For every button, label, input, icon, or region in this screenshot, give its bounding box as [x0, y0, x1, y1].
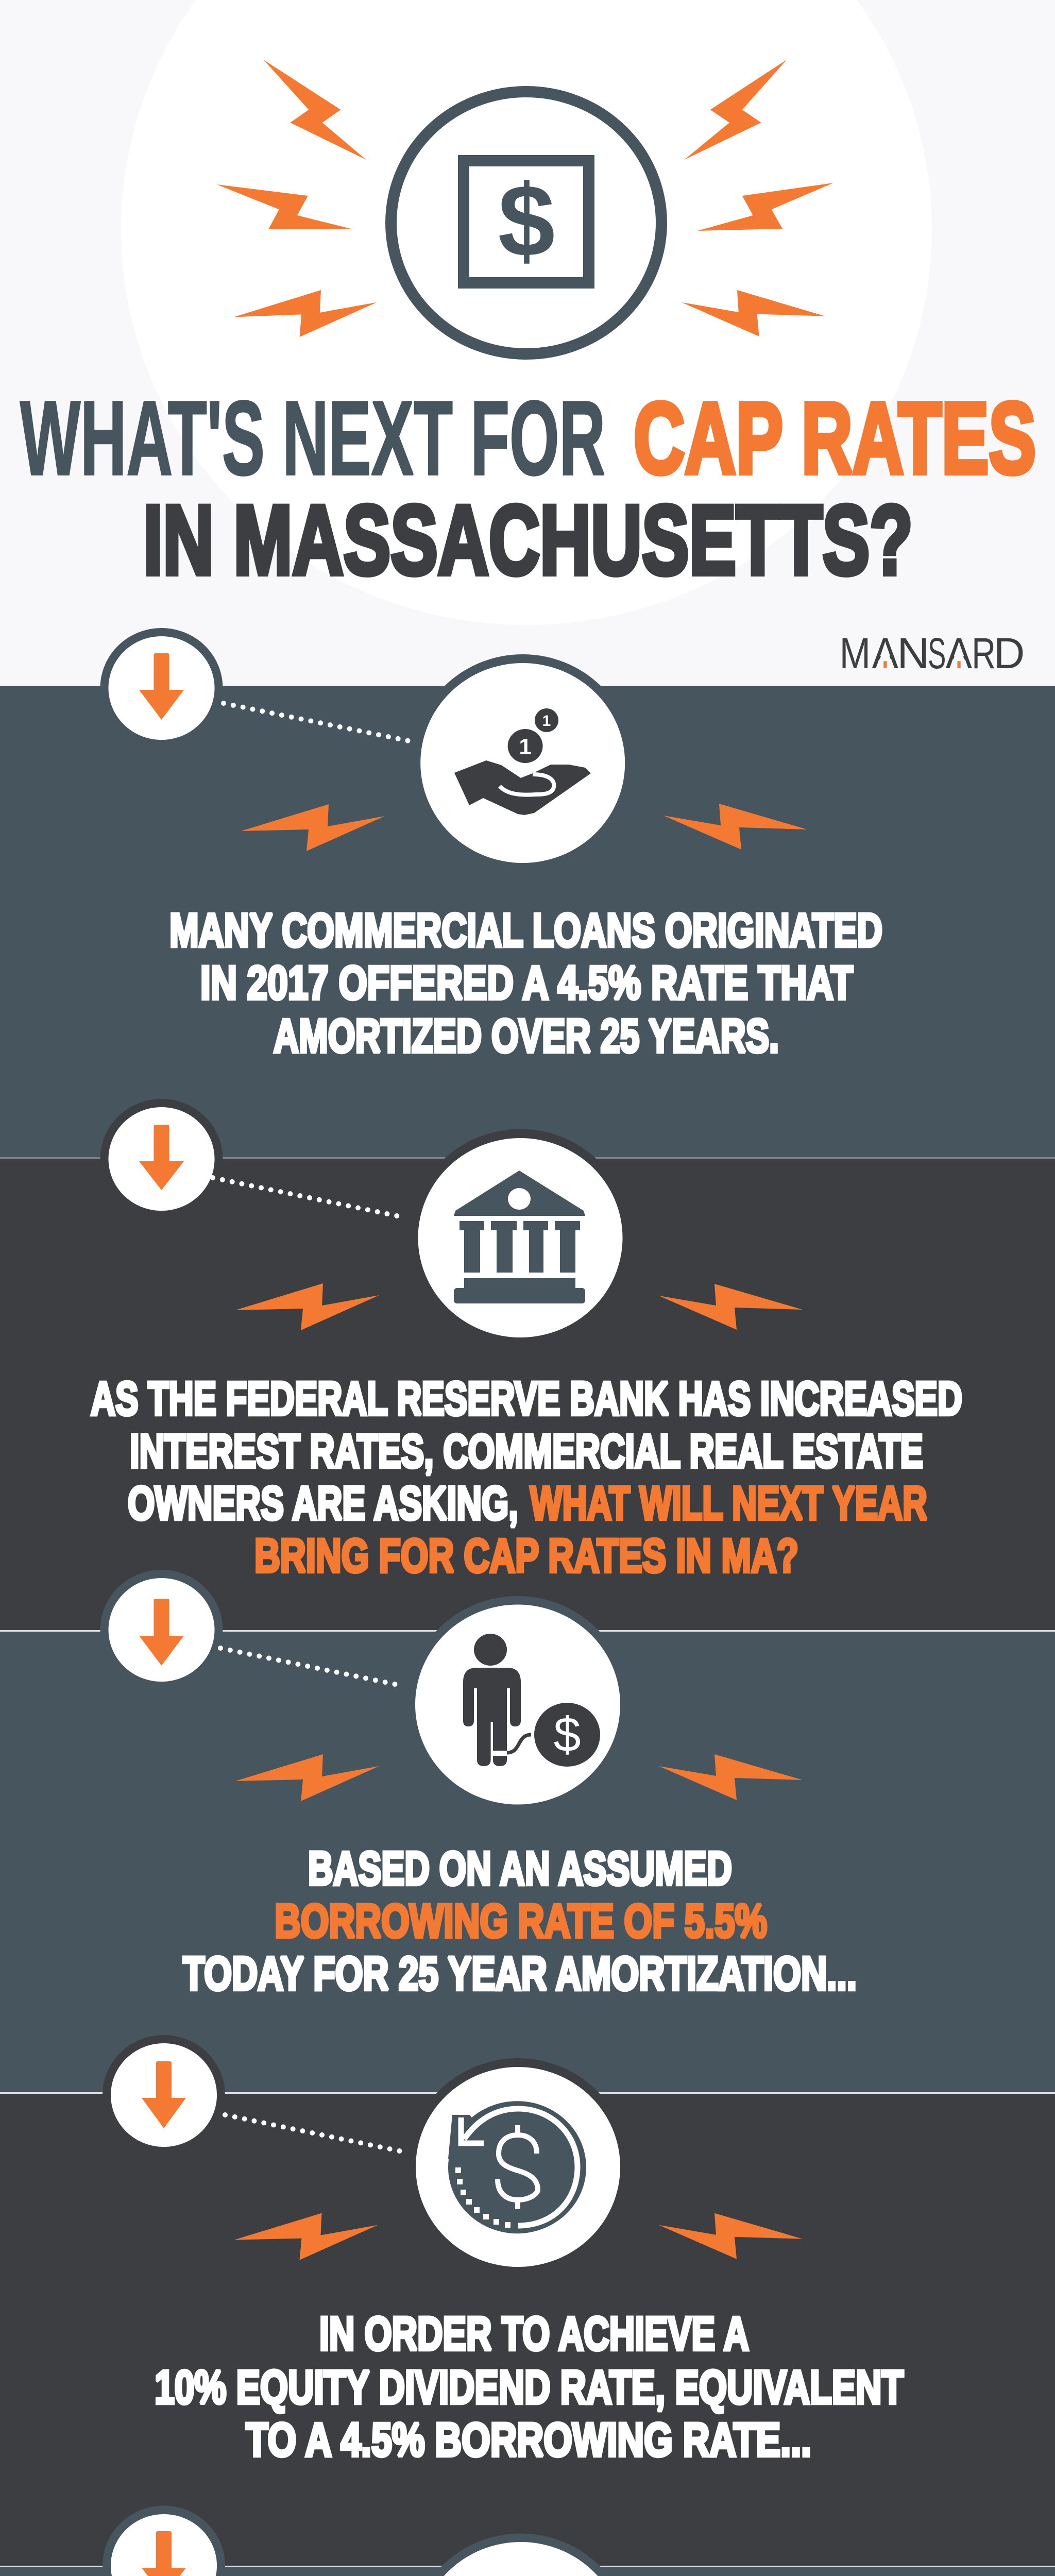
panel: equity dividend: [0, 2035, 1055, 2566]
icon: dollar bill in ring: [391, 92, 661, 354]
icon: dollar bill in ring: $: [498, 164, 555, 278]
dotted connector: [225, 2115, 407, 2153]
icon circle: bank: [410, 1129, 631, 1347]
small Mansard logo: A: [946, 630, 972, 678]
text block: OWNERS ARE ASKING,: [128, 1477, 518, 1530]
arrow badge: [103, 2035, 225, 2155]
white backdrop blob: [121, 0, 932, 625]
text block: AMORTIZED OVER 25 YEARS.: [274, 1010, 779, 1062]
text block: [91, 1372, 962, 1582]
small Mansard logo: M: [840, 630, 871, 678]
lightning bolts: [235, 1754, 803, 1801]
icon circle: rising bar chart: [410, 2534, 632, 2576]
text block: BORROWING RATE OF 5.5%: [275, 1895, 767, 1947]
text block: TO A 4.5% BORROWING RATE...: [246, 2414, 811, 2466]
text block: [169, 904, 882, 1062]
dotted connector: [213, 1178, 404, 1217]
dotted connector: [224, 703, 414, 742]
lightning bolts: [241, 804, 807, 851]
text block: [155, 2308, 904, 2466]
dotted connector: [220, 1648, 402, 1686]
text block: IN ORDER TO ACHIEVE A: [319, 2308, 749, 2360]
title: WHAT'S NEXT FOR: [20, 379, 605, 497]
icon circle: person chained to dollar: $: [554, 1707, 581, 1762]
panel: commercial loans: [0, 628, 1055, 1158]
icon circle: person chained to dollar: [407, 1596, 628, 1813]
arrow badge: [103, 2506, 225, 2576]
lightning bolts: [235, 1283, 803, 1330]
icon: lightning bolts around ring: [217, 60, 833, 337]
small Mansard logo: [840, 630, 1025, 678]
small Mansard logo: N: [897, 630, 929, 678]
arrow badge: [100, 1099, 223, 1219]
panel: borrowing rate: [0, 1570, 1055, 2093]
arrow badge: [100, 628, 223, 748]
text block: BRING FOR CAP RATES IN MA?: [254, 1530, 798, 1582]
small Mansard logo: S: [928, 630, 946, 678]
title: [20, 379, 1036, 595]
text block: [183, 1842, 857, 2000]
icon circle: dollar coin with return arrow: [407, 2058, 628, 2276]
header panel: [0, 0, 1055, 690]
text block: IN 2017 OFFERED A 4.5% RATE THAT: [200, 957, 853, 1009]
text block: TODAY FOR 25 YEAR AMORTIZATION...: [183, 1947, 857, 2000]
icon circle: hand with coins: 1: [542, 713, 551, 730]
icon circle: hand with coins: [412, 654, 634, 872]
lightning bolts: [234, 2213, 803, 2260]
panel: greater boston cap rates: [0, 2506, 1055, 2576]
small Mansard logo: D: [994, 630, 1025, 678]
panel: federal reserve: [0, 1099, 1055, 1631]
icon circle: hand with coins: 1: [519, 734, 532, 759]
small Mansard logo: A: [872, 630, 898, 678]
arrow badge: [100, 1570, 223, 1690]
text block: BASED ON AN ASSUMED: [308, 1842, 732, 1895]
small Mansard logo: R: [972, 630, 996, 678]
